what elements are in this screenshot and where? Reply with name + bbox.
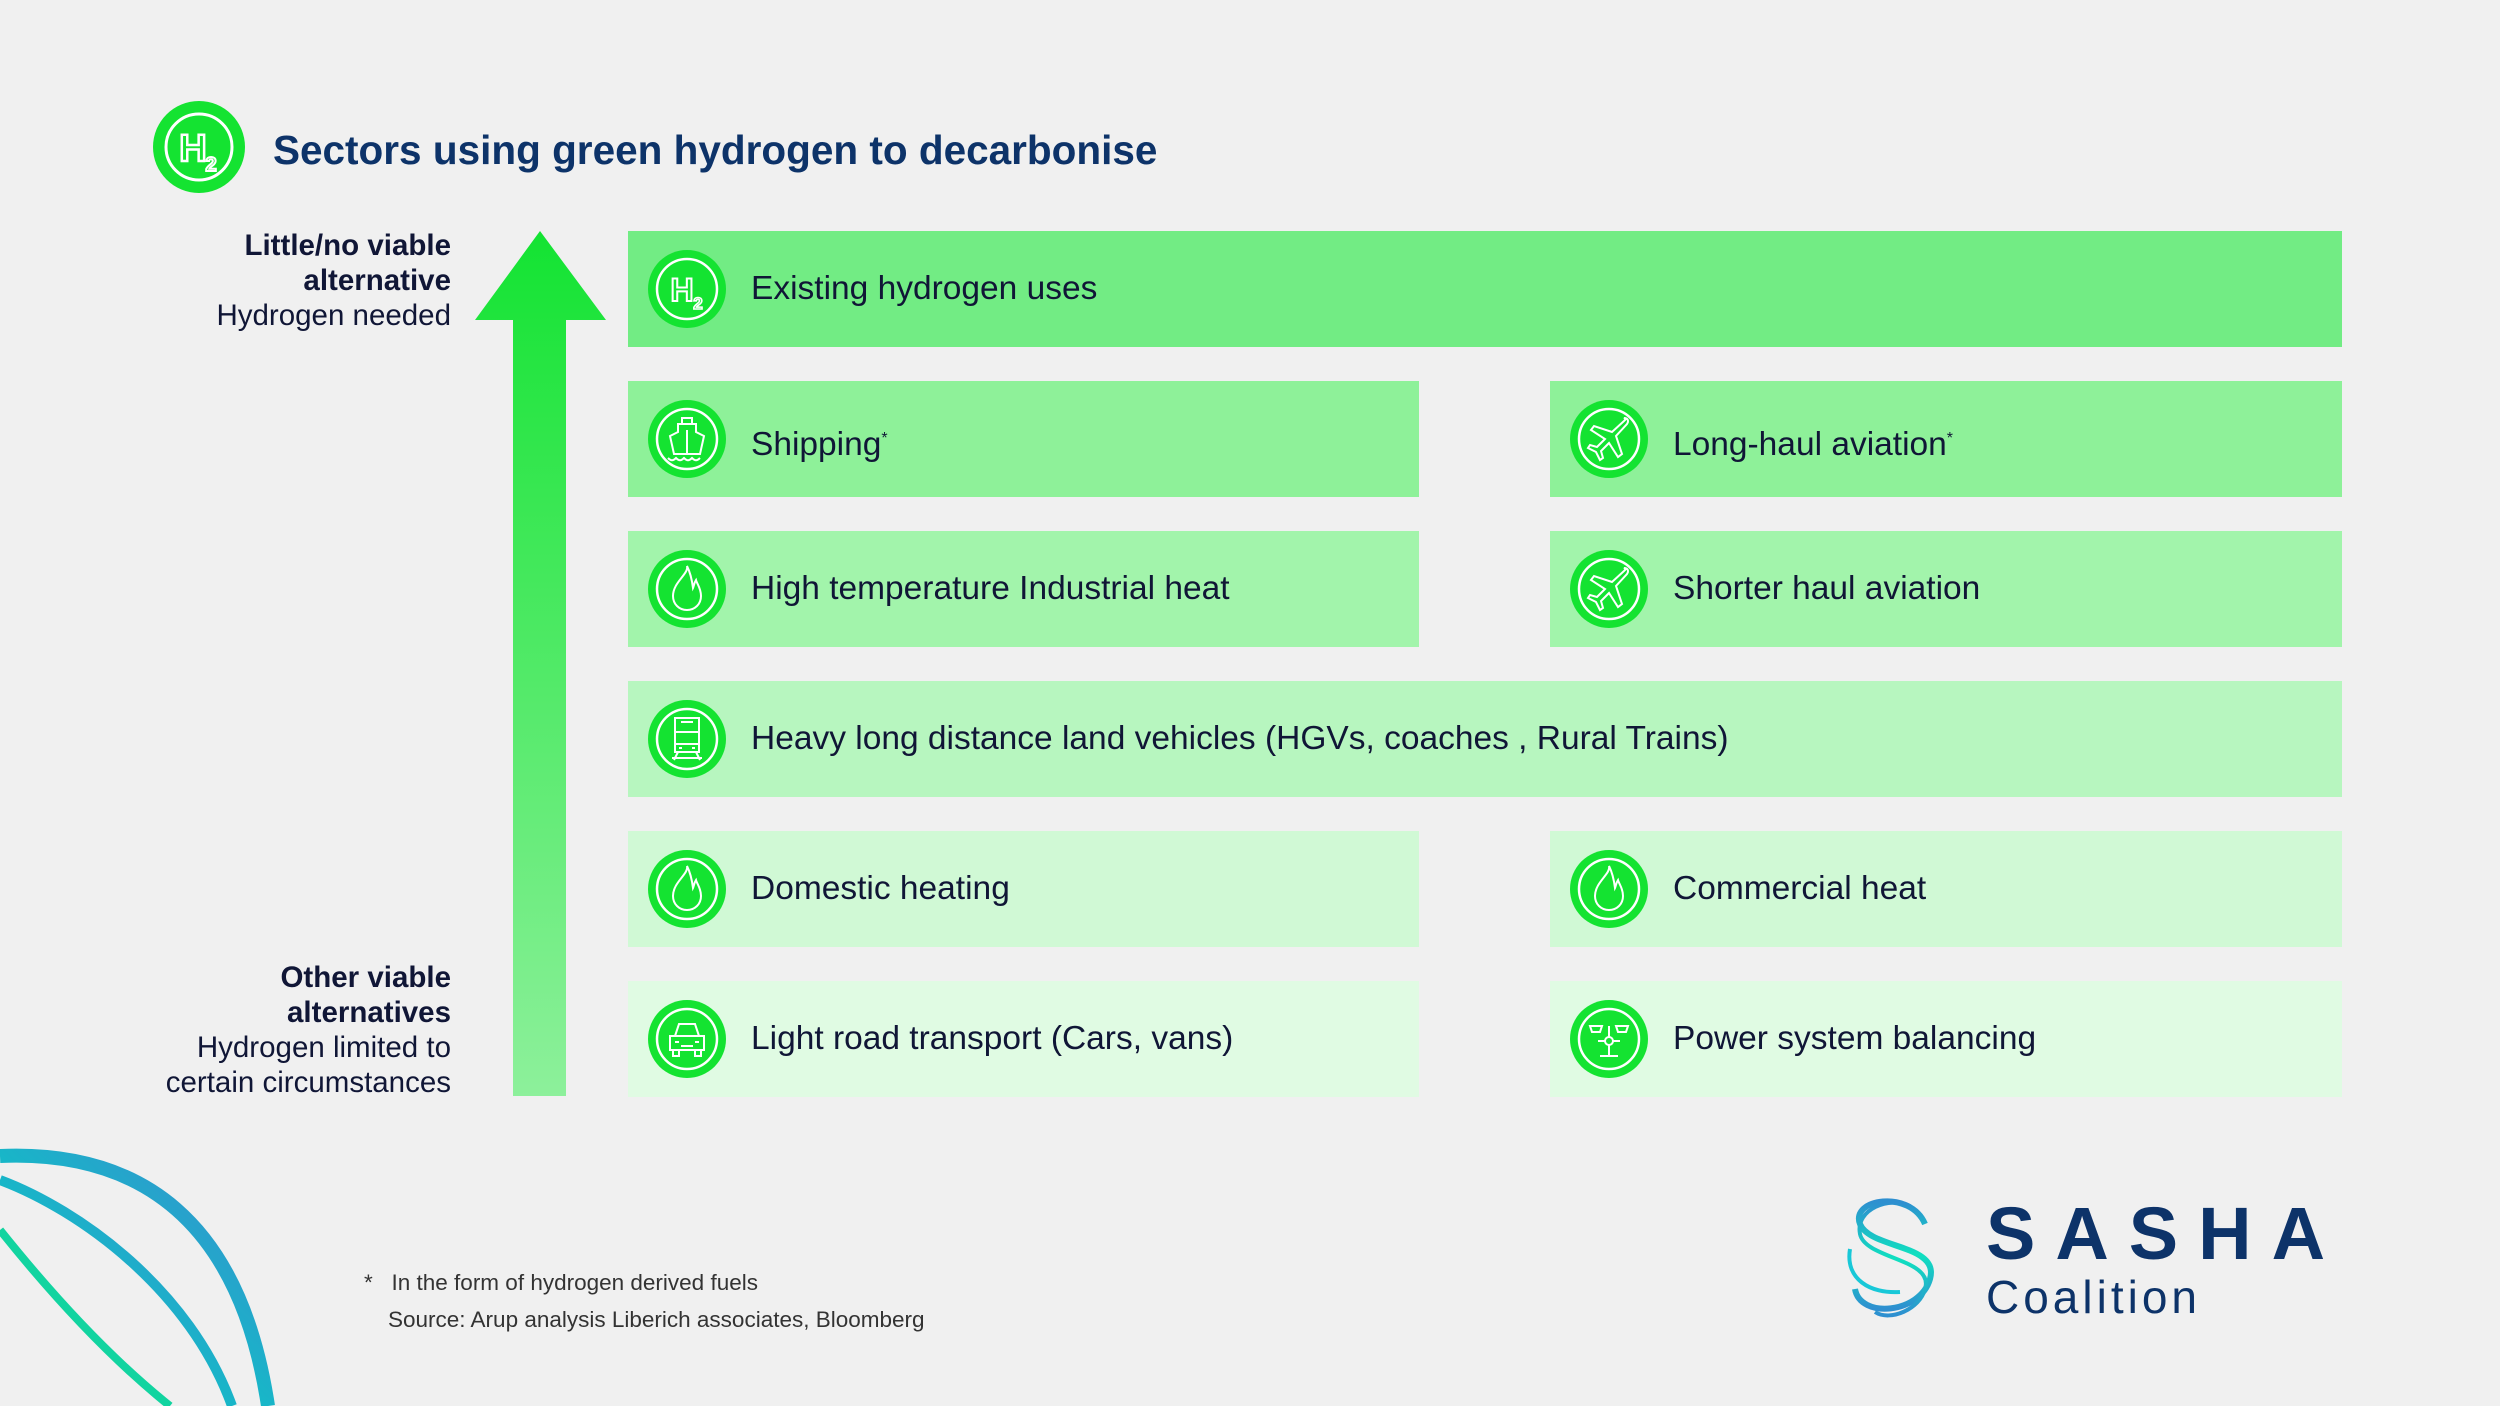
label: bottom: Other viable (280, 961, 451, 994)
icon: flame (648, 550, 726, 628)
row: long-haul aviation: Long-haul aviation* (1673, 426, 1953, 463)
footnote: * In the form of hydrogen derived fuels (364, 1270, 758, 1295)
row: shipping: Shipping* (751, 426, 888, 463)
row: existing hydrogen uses: Existing hydrogen uses (751, 270, 1097, 307)
row: industrial heat (628, 531, 1419, 647)
title: Sectors using green hydrogen to decarbonise (273, 127, 1157, 173)
row: domestic heating: Domestic heating (751, 870, 1010, 907)
row: light road transport (628, 981, 1419, 1097)
row: shipping (628, 381, 1419, 497)
title icon: 2 (205, 154, 217, 176)
icon: plane (1570, 550, 1648, 628)
label: top: alternative (303, 264, 451, 297)
row: long-haul aviation (1550, 381, 2342, 497)
row: light road transport: Light road transport (Cars, vans) (751, 1020, 1233, 1057)
row: existing hydrogen uses (628, 231, 2342, 347)
logo mark (1847, 1198, 1934, 1318)
title icon: H (179, 128, 207, 170)
arrow (475, 231, 606, 1096)
footnote (364, 1270, 925, 1332)
logo: SASHA Coalition: Coalition (1986, 1271, 2201, 1323)
row: heavy vehicles (628, 681, 2342, 797)
row: commercial heat (1550, 831, 2342, 947)
icon: ship (648, 400, 726, 478)
row: heavy vehicles: Heavy long distance land vehicles (HGVs, coaches , Rural Trains) (751, 720, 1729, 757)
row: commercial heat: Commercial heat (1673, 870, 1926, 907)
label: bottom: alternatives (287, 996, 451, 1029)
row: domestic heating (628, 831, 1419, 947)
row: shorter haul aviation: Shorter haul aviation (1673, 570, 1980, 607)
row: power system balancing (1550, 981, 2342, 1097)
title icon (153, 101, 245, 193)
icon: train (648, 700, 726, 778)
label: top (216, 229, 451, 332)
footnote: Source: Arup analysis Liberich associates, Bloomberg (388, 1307, 925, 1332)
icon: H2: H (670, 272, 694, 308)
icon: plane (1570, 400, 1648, 478)
label: bottom: certain circumstances (166, 1066, 451, 1099)
label: bottom: Hydrogen limited to (197, 1031, 451, 1064)
icon: turbine (1570, 1000, 1648, 1078)
icon: H2: 2 (693, 294, 703, 313)
icon: car (648, 1000, 726, 1078)
icon: H2 (648, 250, 726, 328)
icon: flame (648, 850, 726, 928)
label: top: Little/no viable (244, 229, 451, 262)
row: power system balancing: Power system balancing (1673, 1020, 2036, 1057)
label: top: Hydrogen needed (216, 299, 451, 332)
row: shorter haul aviation (1550, 531, 2342, 647)
row: industrial heat: High temperature Industrial heat (751, 570, 1230, 607)
icon: flame (1570, 850, 1648, 928)
logo: SASHA Coalition (1847, 1192, 2345, 1323)
decorative arcs (0, 1148, 275, 1406)
label: bottom (166, 961, 451, 1099)
logo text: SASHA (1986, 1192, 2345, 1275)
